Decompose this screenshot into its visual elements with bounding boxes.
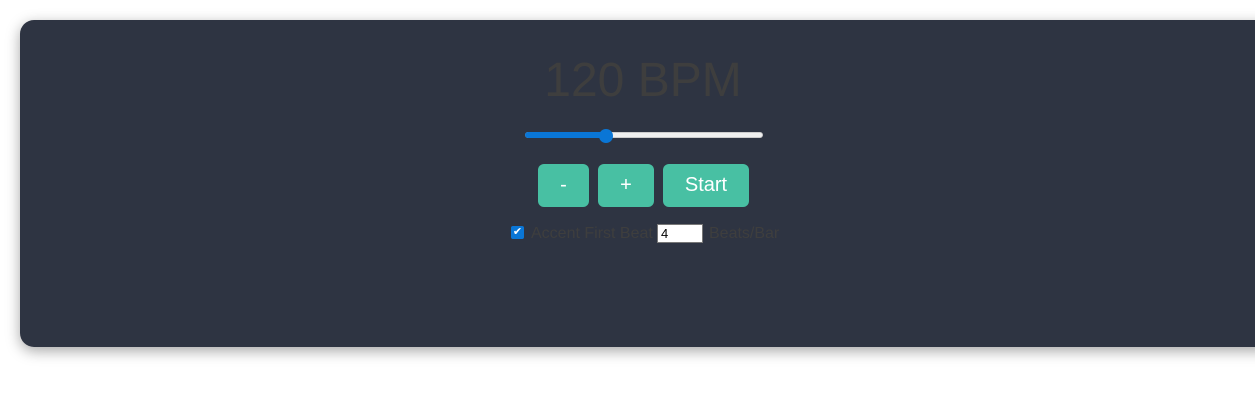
button: start [663, 164, 749, 207]
button: minus: - [560, 174, 567, 196]
label: beats/bar: Beats/Bar [709, 225, 779, 242]
button: minus [538, 164, 589, 207]
input: beats [657, 224, 703, 243]
button: plus [598, 164, 654, 207]
slider [525, 129, 763, 143]
input: beats: 4 [661, 226, 668, 241]
checkbox: ✔ [513, 226, 522, 238]
label: accent first beat: Accent First Beat [531, 225, 653, 242]
title: BPM: 120 BPM [544, 54, 742, 107]
button: plus: + [620, 174, 632, 196]
checkbox [511, 226, 524, 239]
panel: metronome [20, 20, 1255, 347]
options row [511, 224, 779, 243]
button: start: Start [685, 174, 727, 196]
